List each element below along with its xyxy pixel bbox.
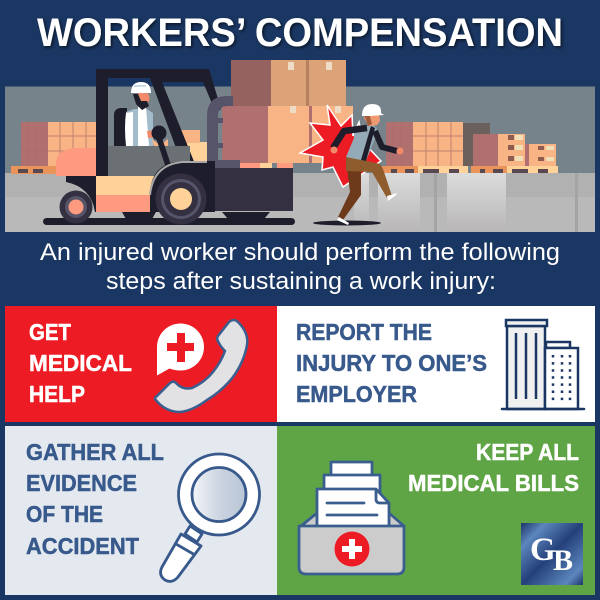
panel: keep medical bills: [277, 426, 595, 595]
hood: [56, 148, 96, 176]
title: WORKERS’ COMPENSATION: [37, 11, 563, 55]
mast: [207, 96, 233, 166]
warehouse floor: [5, 173, 595, 232]
warehouse wall: [5, 86, 595, 174]
heading: MEDICAL BILLS: [408, 470, 579, 496]
heading: [26, 439, 164, 559]
heading: REPORT THE: [296, 319, 432, 345]
subtitle: [40, 239, 560, 295]
rear engine block: [187, 142, 208, 164]
heading: INJURY TO ONE’S: [296, 350, 487, 376]
subtitle: steps after sustaining a work injury:: [106, 268, 496, 295]
panel: gather evidence: [5, 426, 277, 595]
rear wheel: [60, 190, 92, 224]
logo: GB: B: [553, 544, 573, 577]
illustration: warehouse scene: [5, 60, 595, 232]
heading: HELP: [29, 381, 85, 407]
dark body: [66, 176, 96, 212]
salmon panel: [96, 195, 151, 212]
heading: GATHER ALL: [26, 439, 164, 465]
heading: EMPLOYER: [296, 381, 417, 407]
icon: medical chat bubble: [157, 324, 204, 376]
shoes: [337, 193, 397, 225]
logo: GB: G: [530, 532, 556, 568]
heading: [29, 319, 132, 407]
floor bar: [43, 218, 295, 225]
panel: report the injury: [277, 306, 595, 422]
heading: MEDICAL: [29, 350, 132, 376]
counterweight: [215, 168, 293, 211]
head: [364, 113, 380, 126]
peach panel: [96, 176, 160, 195]
front leg: [346, 156, 392, 198]
icon: office buildings: [502, 320, 584, 409]
heading: KEEP ALL: [476, 439, 579, 465]
cab lower panel: [108, 146, 190, 176]
logo: GB: [521, 523, 583, 585]
torso: [346, 125, 378, 161]
icon: telephone: [155, 320, 247, 412]
steering column: [152, 126, 172, 168]
operator: [114, 82, 168, 153]
front wheel: [156, 174, 206, 224]
icon: magnifying glass: [161, 454, 260, 581]
heading: EVIDENCE: [26, 470, 137, 496]
main dark block: [150, 161, 215, 212]
panel: get medical help: [5, 306, 277, 422]
heading: [408, 439, 579, 496]
heading: [296, 319, 487, 407]
injury burst: [300, 105, 381, 187]
injured worker: [313, 104, 404, 226]
floor shadow: [313, 220, 381, 226]
cargo boxes: [222, 60, 353, 169]
right background pallets: [382, 122, 558, 173]
subtitle: An injured worker should perform the following: [40, 239, 560, 266]
left background pallets: [11, 122, 101, 174]
forklift: [43, 69, 295, 225]
heading: ACCIDENT: [26, 533, 139, 559]
heading: GET: [29, 319, 71, 345]
back leg: [338, 168, 361, 220]
heading: OF THE: [26, 501, 103, 527]
arms: [333, 128, 367, 148]
cab frame: [96, 69, 221, 176]
icon: file box with medical cross: [299, 462, 404, 574]
